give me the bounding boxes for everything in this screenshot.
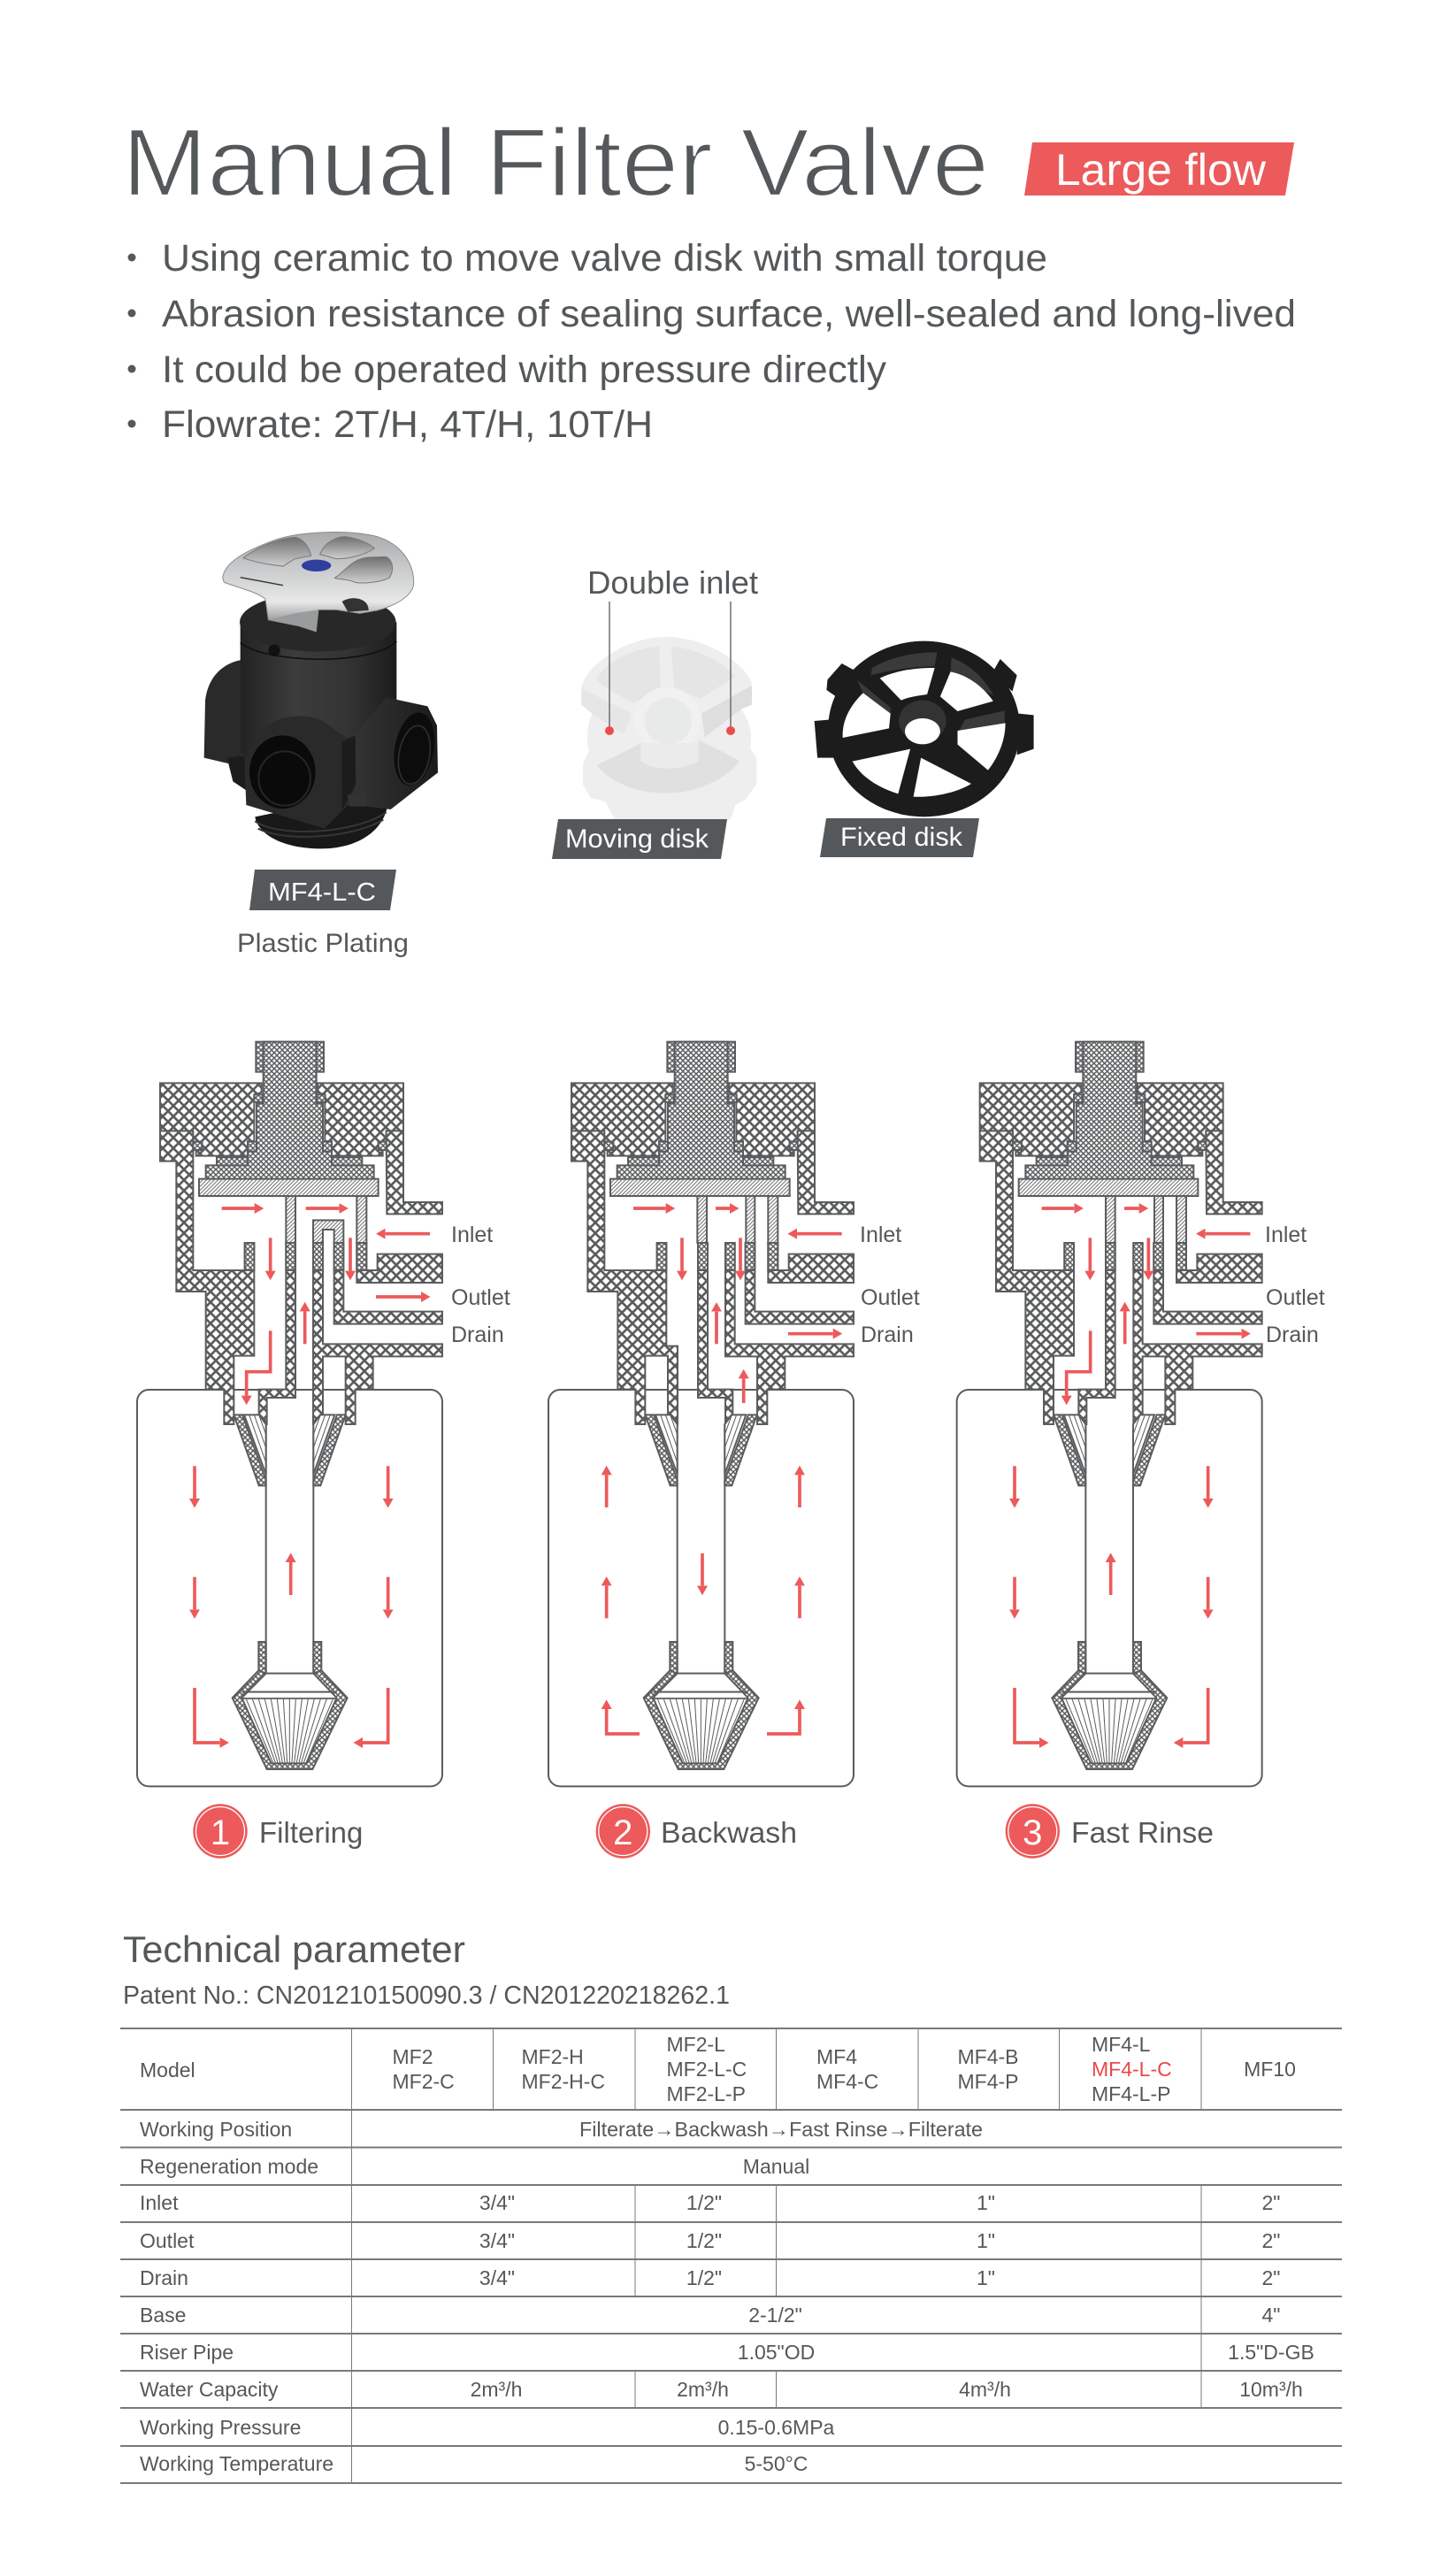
- port labels: filtering: Outlet: [451, 1285, 510, 1310]
- table: technical parameters: [120, 2028, 1342, 2483]
- stage title: backwash: [596, 1804, 797, 1859]
- row labels: Water Capacity: [140, 2378, 279, 2401]
- value cells: 1": [977, 2191, 995, 2214]
- stage title: backwash: 2: [613, 1813, 632, 1852]
- title: Manual Filter Valve: [122, 109, 989, 217]
- port labels: filtering: Inlet: [451, 1223, 493, 1247]
- model header cells: MF2-C: [393, 2070, 455, 2093]
- callout: double inlet: Double inlet: [587, 564, 758, 601]
- stage title: fast rinse: 3: [1023, 1813, 1042, 1852]
- feature list: Using ceramic to move valve disk with small torque: [162, 237, 1047, 280]
- value cells: 2-1/2": [748, 2304, 802, 2327]
- badge: large flow: Large flow: [1055, 145, 1267, 195]
- valve photo illustration: [204, 533, 440, 848]
- value cells: 2": [1262, 2266, 1280, 2289]
- value cells: 1/2": [686, 2266, 722, 2289]
- model header cells: MF4-P: [957, 2070, 1019, 2093]
- model header cells: MF4-L: [1092, 2033, 1151, 2056]
- value cells: 10m³/h: [1239, 2378, 1303, 2401]
- model header cells: MF4: [816, 2045, 857, 2068]
- diagram: backwash: [548, 1042, 854, 1786]
- value cells: 4": [1262, 2304, 1280, 2327]
- model header cells: MF2-H: [522, 2045, 584, 2068]
- model header cells: MF2-L: [667, 2033, 725, 2056]
- fixed disk label: Fixed disk: [840, 823, 963, 852]
- value cells: 2m³/h: [677, 2378, 729, 2401]
- row labels: Inlet: [140, 2191, 179, 2214]
- feature list: Abrasion resistance of sealing surface, well-sealed and long-lived: [162, 293, 1296, 335]
- value cells: 3/4": [479, 2191, 515, 2214]
- model header cells: MF2: [393, 2045, 433, 2068]
- row labels: Riser Pipe: [140, 2341, 234, 2364]
- patent number: Patent No.: CN201210150090.3 / CN201220218262.1: [123, 1982, 730, 2010]
- fixed disk illustration: [815, 641, 1034, 816]
- flow arrows: fast rinse: [1015, 1208, 1250, 1743]
- port labels: filtering: [451, 1223, 510, 1347]
- value cells: 3/4": [479, 2229, 515, 2252]
- diagram: fast rinse: [957, 1042, 1262, 1786]
- port labels: fast rinse: Drain: [1266, 1322, 1319, 1347]
- callout: double inlet: [587, 564, 758, 735]
- value cells: 1/2": [686, 2229, 722, 2252]
- model header cells: MF10: [1244, 2058, 1296, 2081]
- fixed disk label: [820, 818, 979, 857]
- port labels: backwash: Drain: [861, 1322, 914, 1347]
- moving disk label: Moving disk: [565, 824, 709, 854]
- row labels: Working Pressure: [140, 2416, 301, 2439]
- value cells: 5-50°C: [745, 2452, 808, 2475]
- port labels: fast rinse: [1265, 1223, 1325, 1347]
- stage title: fast rinse: Fast Rinse: [1071, 1816, 1214, 1849]
- value cells: 1.5"D-GB: [1228, 2341, 1314, 2364]
- model header cells: MF4-L-P: [1092, 2082, 1170, 2105]
- model header cells: MF4-C: [816, 2070, 878, 2093]
- section heading: technical parameter: Technical parameter: [123, 1928, 465, 1970]
- value cells: 3/4": [479, 2266, 515, 2289]
- port labels: backwash: [860, 1223, 920, 1347]
- row labels: Drain: [140, 2266, 188, 2289]
- feature list: It could be operated with pressure directly: [162, 349, 887, 391]
- value cells: 1.05"OD: [738, 2341, 815, 2364]
- moving disk illustration: [581, 637, 756, 820]
- value cells: Filterate→Backwash→Fast Rinse→Filterate: [579, 2118, 983, 2141]
- value cells: 1": [977, 2229, 995, 2252]
- port labels: fast rinse: Inlet: [1265, 1223, 1307, 1247]
- diagram: filtering: [137, 1042, 442, 1786]
- port labels: filtering: Drain: [451, 1322, 504, 1347]
- feature list: Flowrate: 2T/H, 4T/H, 10T/H: [162, 403, 653, 446]
- value cells: 2m³/h: [471, 2378, 522, 2401]
- flow arrows: backwash: [607, 1208, 842, 1734]
- model header cells: MF2-L-C: [667, 2058, 747, 2081]
- value cells: 2": [1262, 2191, 1280, 2214]
- model header cells: MF4-L-C: [1092, 2058, 1172, 2081]
- stage title: backwash: Backwash: [661, 1816, 797, 1849]
- stage title: filtering: Filtering: [259, 1816, 363, 1849]
- model badge: [249, 870, 396, 910]
- model finish caption: Plastic Plating: [237, 929, 409, 958]
- model header cells: MF2-H-C: [522, 2070, 605, 2093]
- value cells: 0.15-0.6MPa: [718, 2416, 835, 2439]
- row labels: Base: [140, 2304, 186, 2327]
- port labels: backwash: Inlet: [860, 1223, 901, 1247]
- feature list: [127, 237, 1296, 446]
- row labels: [140, 2058, 333, 2475]
- value cells: Manual: [743, 2155, 809, 2178]
- value cells: 2": [1262, 2229, 1280, 2252]
- value cells: 1/2": [686, 2191, 722, 2214]
- row labels: Working Temperature: [140, 2452, 333, 2475]
- port labels: fast rinse: Outlet: [1266, 1285, 1325, 1310]
- port labels: backwash: Outlet: [861, 1285, 920, 1310]
- stage title: fast rinse: [1006, 1804, 1214, 1859]
- model header cells: MF2-L-P: [667, 2082, 746, 2105]
- stage title: filtering: 1: [211, 1813, 230, 1852]
- row labels: Outlet: [140, 2229, 195, 2252]
- moving disk label: [552, 819, 727, 859]
- value cells: [471, 2118, 1314, 2475]
- model header cells: MF4-B: [957, 2045, 1019, 2068]
- row labels: Regeneration mode: [140, 2155, 318, 2178]
- stage title: filtering: [193, 1804, 363, 1859]
- row labels: Model: [140, 2058, 195, 2082]
- value cells: 4m³/h: [959, 2378, 1011, 2401]
- flow arrows: filtering: [195, 1208, 430, 1743]
- value cells: 1": [977, 2266, 995, 2289]
- row labels: Working Position: [140, 2118, 292, 2141]
- model header cells: [393, 2033, 1296, 2105]
- model badge: MF4-L-C: [268, 878, 376, 907]
